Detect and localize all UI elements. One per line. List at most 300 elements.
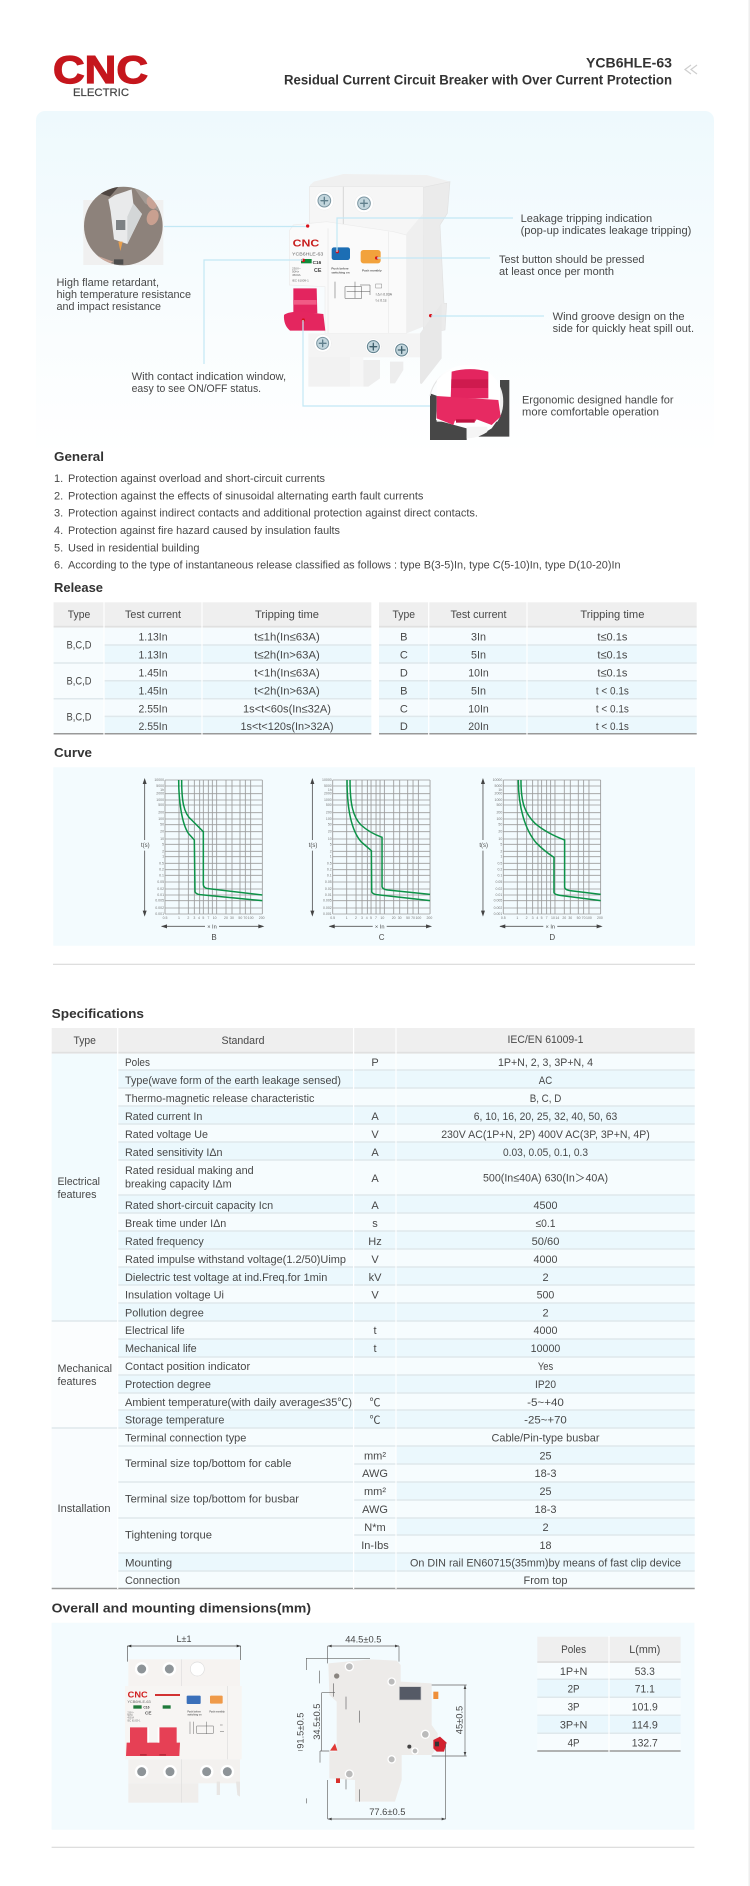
row group: electrical features: AC [539, 1075, 552, 1087]
row group: electrical features: 500(In≤40A) 630(In＞40A) [483, 1173, 608, 1185]
icon: double chevron [685, 65, 697, 74]
table: release left: B,C,D [66, 711, 92, 723]
chart: curve D: 0.2 [497, 868, 502, 872]
chart: curve D: D [549, 933, 555, 942]
row group: installation: Installation [58, 1503, 110, 1515]
chart: curve B [141, 778, 265, 942]
callout text: wind groove: side for quickly heat spill out. [553, 323, 694, 335]
drawing: side view: 77.6±0.5 [369, 1807, 405, 1817]
drawing: front view: CE [145, 1711, 151, 1716]
chart: curve D: 3 [532, 916, 534, 920]
row group: electrical features: Rated frequency [125, 1236, 204, 1248]
drawing: front view: IEC 61009-1 [127, 1720, 141, 1722]
table: release right: 10In [468, 667, 489, 679]
chart: curve B: 100 [248, 916, 254, 920]
chart: curve C: 4 [366, 916, 368, 920]
chart: curve D: 0.001 [494, 912, 502, 916]
callout text: contact window [132, 371, 286, 395]
chart: curve D: 5 [541, 916, 543, 920]
table: release right: 5In [471, 685, 486, 697]
callout text: wind groove [553, 311, 694, 335]
chart: curve C: 70 [411, 916, 415, 920]
row group: installation: Terminal connection type [125, 1432, 246, 1444]
row group: electrical features: Rated impulse withstand voltage(1.2/50)Uimp [125, 1254, 346, 1266]
row group: electrical features: 500 [537, 1290, 554, 1302]
chart: curve B: 1 [178, 916, 180, 920]
row group: electrical features: Poles [125, 1057, 150, 1069]
row group: electrical features: 50/60 [532, 1236, 559, 1248]
table: release left: 1s<t<120s(In>32A) [240, 721, 334, 733]
chart: curve C: t(s) [309, 843, 317, 849]
row group: mechanical features [58, 1325, 567, 1426]
brand logo: ELECTRIC [73, 87, 129, 99]
chart: curve C: 5000 [324, 784, 332, 788]
chart: curve D: 500 [496, 803, 502, 807]
chart: curve C: 100 [415, 916, 421, 920]
table: release left: Type [68, 609, 90, 621]
row group: electrical features: s [372, 1218, 378, 1230]
chart: curve C: 1000 [324, 798, 332, 802]
row group: mechanical features: -5~+40 [527, 1397, 564, 1409]
chart: curve C: 20 [392, 916, 396, 920]
chart: curve B: 0.2 [159, 868, 164, 872]
chart: curve B: 0.005 [155, 899, 164, 903]
callout text: handle: more comfortable operation [522, 406, 659, 418]
row group: electrical features: 2 [542, 1272, 549, 1284]
table: release right: t≤0.1s [597, 632, 628, 644]
row group: electrical features: V [371, 1254, 379, 1266]
row group: electrical features: kV [369, 1272, 382, 1284]
table: release left: t≤1h(In≤63A) [254, 632, 320, 644]
chart: curve D [479, 778, 603, 942]
table: release left: Tripping time [255, 609, 319, 621]
chart: curve B: 0.5 [159, 861, 164, 865]
product photo: circuit breaker: I Δ n 0.03A [376, 292, 393, 296]
chart: curve B: 30 [230, 916, 234, 920]
chart: curve B: 2 [162, 849, 164, 853]
heading: Release: Release [54, 580, 103, 595]
row group: installation: From top [524, 1575, 568, 1587]
chart: curve B: 50 [160, 823, 164, 827]
chart: curve D: 200 [597, 916, 603, 920]
chart: curve D: 2000 [495, 792, 502, 796]
row group: electrical features: Pollution degree [125, 1308, 204, 1320]
chart: curve B: B [211, 933, 217, 942]
chart: curve D: 200 [496, 811, 502, 815]
chart: curve C: 1h [328, 788, 332, 792]
chart: curve C: 200 [426, 916, 432, 920]
chart: curve D: 0.5 [497, 861, 502, 865]
table: release right: Type [393, 609, 415, 621]
product photo: circuit breaker: YCB6HLE-63 [292, 251, 324, 256]
drawing: side view [296, 1635, 467, 1820]
row group: installation: In-Ibs [361, 1540, 389, 1552]
row group: installation: N*m [364, 1522, 386, 1534]
heading: Specifications: Specifications [52, 1006, 144, 1021]
chart: curve B: 70 [243, 916, 247, 920]
table: release right: 20In [468, 721, 489, 733]
chart: curve B: 0.05 [157, 880, 164, 884]
chart: curve C: 0.5 [327, 861, 332, 865]
general list: 4. [54, 525, 63, 537]
table: release left: Test current [125, 609, 181, 621]
row group: installation: 18-3 [534, 1504, 556, 1516]
chart: curve D: 20 [562, 916, 566, 920]
heading: General: General [54, 449, 104, 464]
drawing: side view: 34.5±0.5 [312, 1704, 322, 1740]
table: release left: 2.55In [138, 703, 168, 715]
row group: installation: Mounting [125, 1558, 172, 1570]
drawing: front view: Push monthly [209, 1711, 225, 1714]
row group: electrical features: Rated voltage Ue [125, 1129, 208, 1141]
table: release left: 1.45In [138, 685, 168, 697]
callout text: leakage tripping: Leakage tripping indication [521, 213, 652, 225]
chart: curve C: 0.001 [323, 912, 332, 916]
table: specifications: Standard [222, 1035, 264, 1047]
chart: curve C: 500 [326, 803, 332, 807]
row group: electrical features: Break time under IΔn [125, 1218, 226, 1230]
heading: dimensions: Overall and mounting dimensions(mm) [52, 1601, 311, 1616]
leader lines [164, 218, 544, 406]
table: release right: 3In [471, 632, 486, 644]
row group: electrical features: 230V AC(1P+N, 2P) 400V AC(3P, 3P+N, 4P) [441, 1129, 650, 1141]
product photo: circuit breaker: t ≤ 0.1s [376, 298, 387, 302]
product photo: circuit breaker: 50Hz [292, 270, 299, 274]
product photo: circuit breaker: 4500A [292, 273, 301, 277]
general list: According to the type of instantaneous release classified as follows : type B(3-5)In, type C(5-10)In, type D(10-20)In [68, 560, 621, 572]
table: release right: t≤0.1s [597, 649, 628, 661]
table: pole lengths: 101.9 [632, 1702, 658, 1714]
chart: curve D: 20 [498, 830, 502, 834]
drawing: front view: 50Hz [127, 1715, 134, 1717]
chart: curve B: 7 [207, 916, 209, 920]
chart: curve C: 200 [326, 811, 332, 815]
chart: curve B: t(s) [141, 843, 150, 849]
row group: electrical features: Dielectric test voltage at ind.Freq.for 1min [125, 1272, 327, 1284]
table: release left: 2.55In [138, 721, 168, 733]
row group: installation: On DIN rail EN60715(35mm)by means of fast clip device [410, 1558, 681, 1570]
row group: electrical features: A [371, 1173, 379, 1185]
table: release right: 5In [471, 649, 486, 661]
row group: installation: Terminal size top/bottom for busbar [125, 1494, 299, 1506]
chart: curve C: 0.5 [330, 916, 335, 920]
chart: curve D: 100 [586, 916, 592, 920]
table: release right: C [400, 703, 408, 715]
table: release right: B [400, 632, 407, 644]
chart: curve B: 1000 [156, 798, 164, 802]
chart: curve D: 0.002 [494, 906, 502, 910]
drawing: front view: Push before [187, 1712, 201, 1714]
table: release left [54, 602, 371, 735]
row group: electrical features: 4000 [534, 1254, 558, 1266]
chart: curve B: 0.5 [163, 916, 167, 920]
chart: curve D: 0.05 [496, 880, 502, 884]
table: pole lengths: 132.7 [632, 1737, 658, 1749]
row group: installation: Cable/Pin-type busbar [492, 1432, 600, 1444]
row group: electrical features: V [371, 1129, 379, 1141]
chart: curve D: 0.01 [496, 893, 502, 897]
callout text: wind groove: Wind groove design on the [553, 311, 685, 323]
table: release left: B,C,D [66, 676, 92, 688]
chart: curve D: 5 [500, 842, 502, 846]
product photo: circuit breaker: CE [314, 268, 322, 274]
drawing: front view: C16 [143, 1706, 150, 1710]
table: pole lengths: 3P [568, 1702, 580, 1714]
table: release left: t≤2h(In>63A) [254, 649, 320, 661]
row group: mechanical features: IP20 [535, 1379, 556, 1391]
row group: electrical features: Rated current In [125, 1111, 202, 1123]
chart: curve B: 200 [259, 916, 265, 920]
row group: mechanical features: Electrical life [125, 1325, 185, 1337]
row group: electrical features: Rated residual making and [125, 1165, 254, 1177]
product photo: circuit breaker: IEC 61009-1 [292, 279, 309, 283]
chart: curve C: 0.05 [325, 880, 332, 884]
general list: 2. [54, 490, 63, 502]
callout: flame retardant photo [83, 185, 163, 267]
chart: curve C: 10000 [322, 778, 332, 782]
row group: electrical features: Hz [368, 1236, 382, 1248]
row group: electrical features: Type(wave form of the earth leakage sensed) [125, 1075, 341, 1087]
panel: curves [53, 767, 695, 946]
callout text: flame retardant: and impact resistance [56, 301, 161, 313]
row group: electrical features: 1P+N, 2, 3, 3P+N, 4 [498, 1057, 593, 1069]
chart: curve D: 1000 [495, 798, 502, 802]
drawing: front view: L±1 [177, 1634, 191, 1644]
table: pole lengths: 1P+N [560, 1666, 587, 1678]
table: pole lengths: 114.9 [632, 1720, 658, 1732]
row group: mechanical features: Mechanical life [125, 1343, 197, 1355]
row group: mechanical features: Contact position indicator [125, 1361, 251, 1373]
chart: curve C: 50 [406, 916, 410, 920]
table: pole lengths: L(mm) [629, 1644, 660, 1656]
drawing: side view: 91.5±0.5 [296, 1713, 306, 1749]
row group: installation: mm² [364, 1450, 386, 1462]
table: release right: D [400, 721, 408, 733]
callout text: contact window: With contact indication window, [132, 371, 286, 383]
callout text: leakage tripping: (pop-up indicates leakage tripping) [521, 225, 691, 237]
chart: curve D: 1 [500, 855, 502, 859]
chart: curve D: 1 [516, 916, 518, 920]
table: release left: 1s<t<60s(In≤32A) [243, 703, 331, 715]
table: release right: B [400, 685, 407, 697]
row group: mechanical features: Storage temperature [125, 1414, 224, 1426]
header title: YCB6HLE-63 [586, 54, 672, 70]
general list: Protection against the effects of sinusoidal alternating earth fault currents [68, 490, 424, 502]
chart: curve C: 7 [375, 916, 377, 920]
table: release right: Test current [450, 609, 506, 621]
table: specifications: Type [73, 1035, 96, 1047]
table: release left: 1.45In [138, 667, 168, 679]
row group: mechanical features: -25~+70 [524, 1414, 567, 1426]
table: release right: t≤0.1s [597, 667, 628, 679]
row group: electrical features: Rated sensitivity IΔn [125, 1147, 222, 1159]
row group: electrical features: Rated short-circuit capacity Icn [125, 1200, 273, 1212]
header title [284, 54, 672, 88]
row group: installation: mm² [364, 1486, 386, 1498]
chart: curve B: 2 [187, 916, 189, 920]
row group: mechanical features: ℃ [370, 1414, 380, 1426]
chart: curve C: 100 [326, 817, 332, 821]
chart: curve D: 30 [568, 916, 572, 920]
chart: curve D: 2 [500, 849, 502, 853]
table: release left: B,C,D [66, 640, 92, 652]
table: release left: 1.13In [138, 632, 168, 644]
chart: curve D: 5000 [495, 784, 502, 788]
chart: curve B: 1 [162, 855, 164, 859]
chart: curve C: 2 [330, 849, 332, 853]
chart: curve D: 100 [496, 817, 502, 821]
chart: curve D: 14 [555, 916, 559, 920]
chart: curve B: 5 [162, 842, 164, 846]
table: release right: Tripping time [580, 609, 644, 621]
callout text: flame retardant: high temperature resistance [56, 289, 191, 301]
chart: curve D: 10000 [493, 778, 502, 782]
chart: curve B: 20 [224, 916, 228, 920]
chart: curve D: 0.1 [497, 873, 502, 877]
chart: curve C: 2000 [324, 792, 332, 796]
row group: mechanical features: Yes [538, 1361, 554, 1373]
chart: curve C: C [379, 933, 385, 942]
chart: curve C [309, 778, 432, 942]
drawing: front view: YCB6HLE-63 [127, 1700, 151, 1704]
drawing: front view: 4500A [127, 1717, 135, 1720]
callout text: handle [522, 394, 674, 418]
row group: electrical features: P [371, 1057, 379, 1069]
table: release right [379, 602, 697, 735]
chart: curve C: 5 [370, 916, 372, 920]
row group: electrical features: Thermo-magnetic release characteristic [125, 1093, 315, 1105]
row group: electrical features: V [371, 1290, 379, 1302]
chart: curve B: 0.1 [159, 873, 164, 877]
table: specifications: IEC/EN 61009-1 [508, 1034, 584, 1046]
table: release right: C [400, 649, 408, 661]
row group: mechanical features: t [373, 1325, 377, 1337]
chart: curve C: 0.005 [323, 899, 332, 903]
chart: curve D: × In [546, 924, 555, 930]
row group: electrical features: Insulation voltage Ui [125, 1290, 224, 1302]
chart: curve B: 1h [160, 788, 164, 792]
header title: Residual Current Circuit Breaker with Over Current Protection [284, 72, 672, 88]
general list: Protection against fire hazard caused by insulation faults [68, 525, 340, 537]
chart: curve B: × In [207, 924, 217, 930]
row group: electrical features: 6, 10, 16, 20, 25, 32, 40, 50, 63 [474, 1111, 617, 1123]
row group: electrical features: 2 [542, 1308, 549, 1320]
row group: installation: Tightening torque [125, 1529, 212, 1541]
table: pole lengths: 3P+N [560, 1720, 587, 1732]
row group: electrical features: 0.03, 0.05, 0.1, 0.3 [503, 1147, 588, 1159]
chart: curve B: 10 [213, 916, 217, 920]
general list: Protection against overload and short-circuit currents [68, 473, 325, 485]
product photo: circuit breaker: CNC [293, 239, 320, 250]
drawing: front view [125, 1634, 242, 1803]
table: release right: t < 0.1s [596, 721, 629, 733]
chart: curve B: 2000 [156, 792, 164, 796]
table: pole lengths: 71.1 [635, 1684, 655, 1696]
screws [314, 191, 410, 358]
chart: curve D: 0.005 [494, 899, 502, 903]
chart: curve D: 0.5 [501, 916, 506, 920]
table: release left: t<2h(In>63A) [254, 685, 320, 697]
chart: curve B: 4 [198, 916, 200, 920]
chart: curve D: 0.02 [496, 887, 502, 891]
chart: curve C: 3 [361, 916, 363, 920]
callout text: test button: at least once per month [499, 266, 614, 278]
row group: installation: 2 [542, 1522, 549, 1534]
general list: Used in residential building [68, 542, 200, 554]
chart: curve B: 10000 [154, 778, 164, 782]
chart: curve B: 20 [160, 830, 164, 834]
chart: curve B: 200 [158, 811, 164, 815]
chart: curve B: 0.02 [157, 887, 164, 891]
row group: electrical features: ≤0.1 [536, 1218, 556, 1230]
row group: electrical features: features [58, 1189, 97, 1201]
panel: dimensions [52, 1623, 694, 1830]
heading: Curve: Curve [54, 745, 92, 760]
chart: curve D: 2 [526, 916, 528, 920]
table: release left: t<1h(In≤63A) [254, 667, 320, 679]
chart: curve C: 1 [330, 855, 332, 859]
chart: curve B: 50 [238, 916, 242, 920]
chart: curve D: 1h [498, 788, 502, 792]
chart: curve B: 5000 [156, 784, 164, 788]
row group: mechanical features: 4000 [534, 1325, 558, 1337]
row group: installation: 25 [540, 1450, 552, 1462]
row group: installation: 18 [540, 1540, 552, 1552]
general list: 3. [54, 508, 63, 520]
row group: electrical features: Electrical [58, 1176, 100, 1188]
drawing: side view: 45±0.5 [455, 1706, 465, 1734]
chart: curve C: 10 [328, 837, 332, 841]
product photo: circuit breaker: C16 [313, 260, 322, 265]
chart: curve D: 50 [498, 823, 502, 827]
row group: mechanical features: 10000 [531, 1343, 560, 1355]
general list: 1. [54, 473, 63, 485]
chart: curve B: 0.001 [155, 912, 164, 916]
general list: 6. [54, 560, 63, 572]
callout text: test button: Test button should be pressed [499, 254, 644, 266]
callout text: leakage tripping [521, 213, 691, 237]
row group: installation: Connection [125, 1575, 180, 1587]
row group: mechanical features: features [58, 1376, 97, 1388]
chart: curve C: 0.2 [327, 868, 332, 872]
brand logo: CNC [53, 49, 148, 92]
row group: mechanical features: Mechanical [58, 1363, 112, 1375]
chart: curve D: 10 [551, 916, 555, 920]
row group: mechanical features: Ambient temperature(with daily average≤35℃) [125, 1397, 352, 1409]
chart: curve B: 100 [158, 817, 164, 821]
general list: Protection against indirect contacts and additional protection against direct contacts. [68, 508, 478, 520]
callout text: handle: Ergonomic designed handle for [522, 394, 674, 406]
chart: curve D: 7 [546, 916, 548, 920]
general list [54, 473, 621, 572]
row group: mechanical features: t [373, 1343, 377, 1355]
drawing: front view: CNC [128, 1691, 148, 1700]
row group: electrical features: B, C, D [530, 1093, 561, 1105]
table: pole lengths [537, 1636, 681, 1752]
callout text: contact window: easy to see ON/OFF status. [132, 383, 261, 395]
panel: product hero [36, 111, 714, 455]
chart: curve C: 50 [328, 823, 332, 827]
product photo: circuit breaker: switching on [331, 270, 350, 274]
row group: electrical features: A [371, 1111, 379, 1123]
general list: 5. [54, 542, 63, 554]
product photo: circuit breaker: 230V~ [292, 266, 301, 270]
row group: installation: AWG [362, 1504, 388, 1516]
row group: electrical features [58, 1057, 650, 1320]
row group: installation [58, 1432, 681, 1587]
chart: curve D: 4 [536, 916, 538, 920]
chart: curve C: 0.02 [325, 887, 332, 891]
